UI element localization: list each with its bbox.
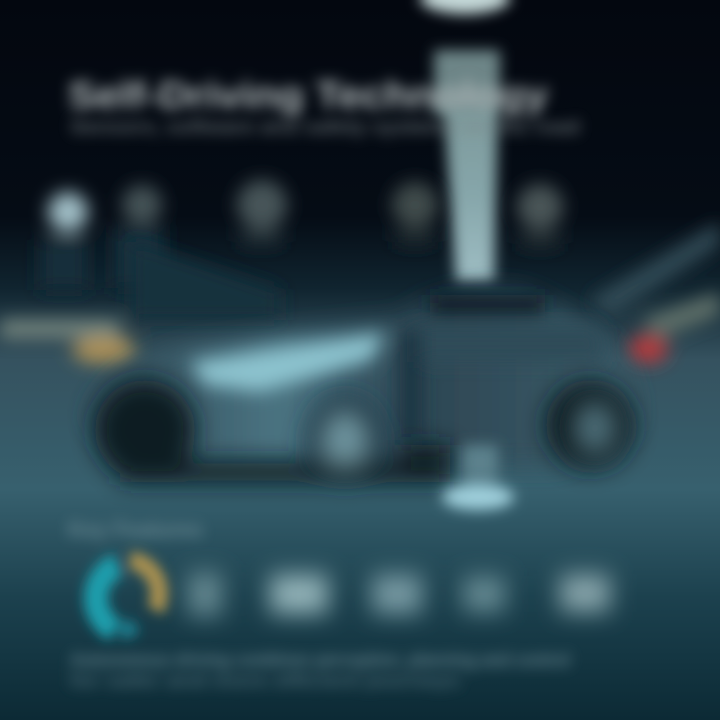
footer text: for safer and more efficient journeys [70,673,460,690]
icon: radar [237,180,287,244]
wheels [95,380,634,484]
metric 3 [372,574,422,614]
bottom metric row [188,572,610,616]
metric 4 [463,576,505,612]
car [90,289,634,484]
vertical light beam [420,0,510,282]
icon: processor [517,184,563,246]
top icon row [40,180,563,290]
subtitle: Sensors, software and safety systems on the road [70,117,580,137]
metric 2 [270,574,328,614]
icon: camera [112,185,164,288]
section label: Key Features [68,517,203,542]
car body [90,289,632,465]
footer text: Autonomous driving combines perception, planning and control [70,650,570,670]
icon: lidar [392,182,438,244]
footer text [70,650,570,690]
ground light spot [442,445,514,510]
icon: sensor [40,192,88,290]
road streaks and tail lights [0,222,720,364]
title: Self-Driving Technology [68,75,548,117]
donut chart [96,560,159,632]
windscreen highlight [190,295,605,440]
metric 1 [188,572,222,616]
metric 5 [560,574,610,612]
